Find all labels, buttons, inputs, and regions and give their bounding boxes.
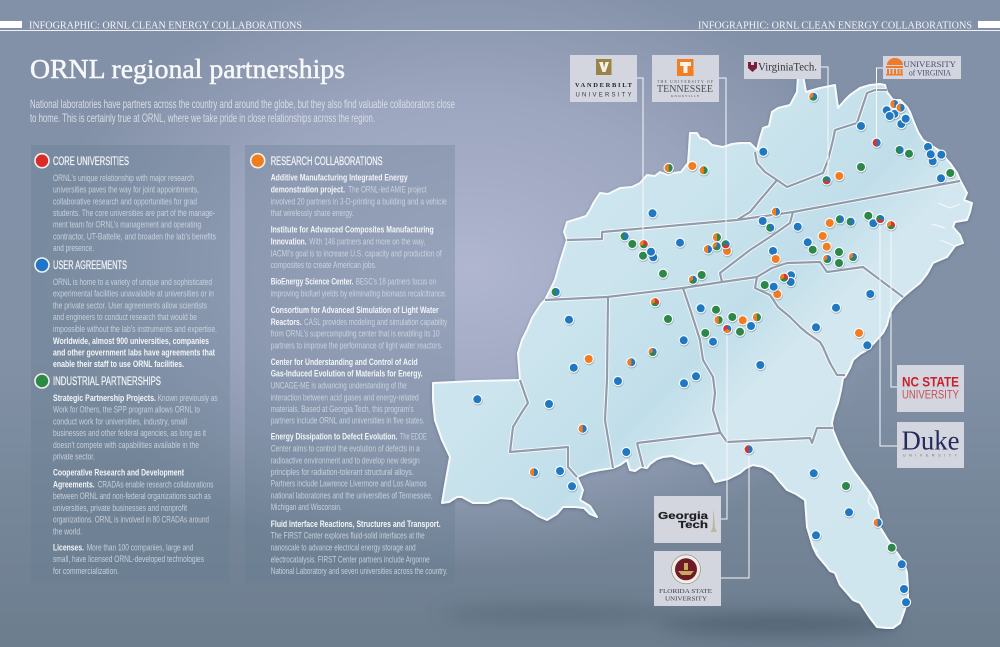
- section: core universities: universities paves the way for joint appointments,: [53, 185, 199, 196]
- map of the southeastern states: [433, 75, 972, 628]
- logo: University of Tennessee: [652, 55, 719, 102]
- logo: Vanderbilt University: VANDERBILT: [575, 82, 633, 89]
- map ground shadow: [440, 605, 900, 635]
- icon: Virginia Tech mark: [748, 62, 757, 72]
- logo: Virginia Tech: VirginiaTech.: [758, 62, 817, 74]
- item: CASL: [271, 305, 447, 351]
- icon: blue bullet: [34, 257, 50, 273]
- logo: Georgia Tech: [654, 496, 721, 543]
- section: core universities: CORE UNIVERSITIES: [53, 156, 129, 168]
- item: IACMI: IACMI's goal is to increase U.S. capacity and production of: [271, 248, 442, 259]
- map markers: Tennessee: [550, 216, 803, 298]
- item: FIRST: National Laboratory and seven universities across the country.: [271, 566, 448, 577]
- section: core universities: ORNL's unique relationship with major research: [53, 173, 194, 184]
- item: FIRST: electrocatalysis. FIRST Center partners include Argonne: [271, 554, 430, 565]
- item: EDDE: Center aims to control the evolution of defects in a: [271, 443, 420, 454]
- item: CASL: from ORNL's supercomputing center that is enabling its 10: [271, 329, 440, 340]
- logo: Vanderbilt University: [570, 55, 637, 102]
- section: industrial partnerships: organizations. ORNL is involved in 80 CRADAs around: [53, 515, 209, 526]
- section: user agreements: impossible without the lab's instruments and expertise.: [53, 324, 217, 335]
- header right: INFOGRAPHIC: ORNL CLEAN ENERGY COLLABORATIONS: [698, 20, 972, 32]
- intro text: National laboratories have partners across the country and around the globe, but they also find valuable collaborators close: [30, 97, 455, 111]
- item: IACMI: With 146 partners and more on the way,: [309, 236, 425, 247]
- section: industrial partnerships: businesses and other federal agencies, as long as it: [53, 428, 206, 439]
- section: industrial partnerships: More than 100 companies, large and: [87, 542, 193, 553]
- item: CASL: Reactors.: [271, 317, 302, 328]
- section: industrial partnerships: Known previously as: [158, 393, 218, 404]
- map markers: Kentucky and West Virginia: [647, 92, 819, 220]
- item: AMIE: that wirelessly share energy.: [271, 208, 354, 219]
- icon: orange bullet: [250, 153, 266, 168]
- item: EDDE: The EDDE: [400, 432, 427, 443]
- section: industrial partnerships: Work for Others, the SPP program allows ORNL to: [53, 405, 200, 416]
- item: FIRST: Fluid Interface Reactions, Structures and Transport.: [271, 519, 441, 530]
- logo: Florida State University: [654, 551, 721, 606]
- logo: Duke University: UNIVERSITY: [903, 454, 958, 458]
- land mass: [433, 75, 972, 628]
- item: EDDE: principles for radiation-tolerant structural alloys.: [271, 467, 414, 478]
- section: user agreements: USER AGREEMENTS: [53, 260, 127, 272]
- item: EDDE: radioactive environment and to develop new design: [271, 455, 420, 466]
- coastal inlets: [812, 203, 960, 552]
- logo: Florida State University: FLORIDA STATE: [659, 588, 712, 595]
- logo: University of Tennessee: THE UNIVERSITY OF: [657, 80, 713, 84]
- icon: Vanderbilt V: [596, 59, 612, 75]
- intro text: [30, 97, 455, 125]
- icon: FSU seal: [672, 555, 700, 584]
- section: industrial partnerships: INDUSTRIAL PARTNERSHIPS: [53, 376, 161, 388]
- section: core universities: students. The core universities are part of the manage-: [53, 208, 215, 219]
- section: core universities: ment team for ORNL's management and operating: [53, 220, 201, 231]
- item: AMIE: demonstration project.: [271, 184, 345, 195]
- section: industrial partnerships: small, have licensed ORNL-developed technologies: [53, 554, 204, 565]
- logo: University of Tennessee: TENNESSEE: [657, 83, 713, 95]
- section: core universities: collaborative research and opportunities for grad: [53, 196, 197, 207]
- section: industrial partnerships: [34, 373, 218, 577]
- section: user agreements: [34, 257, 217, 370]
- item: FIRST: The FIRST Center explores fluid-solid interfaces at the: [271, 531, 425, 542]
- icon: red bullet: [34, 153, 50, 168]
- section: industrial partnerships: Strategic Partnership Projects.: [53, 393, 156, 404]
- section: industrial partnerships: between ORNL and non-federal organizations such as: [53, 491, 211, 502]
- section: user agreements: experimental facilities unavailable at universities or in: [53, 289, 214, 300]
- item: IACMI: Institute for Advanced Composites Manufacturing: [271, 225, 434, 236]
- logo: Georgia Tech: Tech: [678, 519, 708, 531]
- connector lines to university logos: [637, 67, 897, 578]
- section: user agreements: and other government labs have agreements that: [53, 348, 216, 358]
- item: CASL: CASL provides modeling and simulation capability: [304, 317, 447, 328]
- section: industrial partnerships: Licenses.: [53, 542, 84, 553]
- section: industrial partnerships: Cooperative Research and Development: [53, 468, 185, 479]
- map markers: South Carolina and Georgia: [696, 280, 876, 371]
- title: ORNL regional partnerships: [30, 54, 345, 84]
- header left: INFOGRAPHIC: ORNL CLEAN ENERGY COLLABORATIONS: [29, 20, 302, 32]
- item: UNCAGE-ME: Center for Understanding and Control of Acid: [271, 357, 418, 368]
- section: industrial partnerships: CRADAs enable research collaborations: [98, 479, 214, 490]
- item: IACMI: [271, 225, 442, 271]
- item: IACMI: Innovation.: [271, 236, 307, 247]
- intro text: to home. This is certainly true at ORNL, where we take pride in close relationships across the region.: [30, 111, 375, 125]
- item: CASL: partners to improve the performance of light water reactors.: [271, 340, 443, 351]
- item: UNCAGE-ME: Gas-Induced Evolution of Materials for Energy.: [271, 369, 423, 380]
- section: industrial partnerships: private sector.: [53, 452, 95, 463]
- item: EDDE: [271, 432, 433, 513]
- section: user agreements: the private sector. User agreements allow scientists: [53, 300, 207, 312]
- map markers: Virginia: [771, 99, 956, 218]
- item: BESC: BioEnergy Science Center.: [271, 277, 353, 288]
- logo: University of Virginia: of VIRGINIA: [909, 68, 952, 78]
- item: BESC: BESC's 18 partners focus on: [356, 277, 436, 288]
- header left: [0, 20, 1000, 32]
- section: user agreements: and engineers to conduct research that would be: [53, 312, 197, 323]
- logo: NC State University: UNIVERSITY: [902, 390, 959, 402]
- item: EDDE: national laboratories and the universities of Tennessee,: [271, 490, 433, 501]
- section: industrial partnerships: conduct work for universities, industry, small: [53, 416, 187, 427]
- item: FIRST: nanoscale to advance electrical energy storage and: [271, 543, 416, 554]
- panel: left column: [31, 145, 230, 583]
- item: EDDE: Michigan and Wisconsin.: [271, 502, 342, 513]
- section: user agreements: ORNL is home to a variety of unique and sophisticated: [53, 277, 212, 288]
- logo: University of Virginia: [883, 56, 961, 79]
- item: BESC: [271, 277, 447, 299]
- state borders: [510, 90, 960, 477]
- item: BESC: improving biofuel yields by eliminating biomass recalcitrance.: [271, 288, 447, 299]
- section: user agreements: Worldwide, almost 900 universities, companies: [53, 336, 209, 347]
- section: core universities: [34, 153, 216, 254]
- item: UNCAGE-ME: [271, 357, 425, 427]
- item: AMIE: [271, 173, 447, 219]
- item: IACMI: composites to create American jobs.: [271, 260, 377, 271]
- icon: green bullet: [34, 373, 50, 389]
- map markers: North Carolina: [768, 210, 897, 288]
- section: user agreements: enable their staff to use ORNL facilities.: [53, 359, 184, 370]
- item: UNCAGE-ME: interaction between acid gases and energy-related: [271, 392, 419, 403]
- panel: research collaborations: [245, 145, 455, 583]
- map markers: Florida: [744, 444, 912, 608]
- logo: NC State University: [897, 365, 964, 412]
- item: UNCAGE-ME: materials. Based at Georgia Tech, this program's: [271, 404, 414, 415]
- item: CASL: Consortium for Advanced Simulation of Light Water: [271, 305, 439, 316]
- logo: NC State University: NC STATE: [902, 374, 959, 390]
- heading: research collaborations: RESEARCH COLLABORATIONS: [271, 156, 383, 168]
- section: core universities: and presence.: [53, 243, 94, 254]
- section: core universities: contractor, UT-Battelle, and broaden the lab's benefits: [53, 231, 216, 242]
- section: industrial partnerships: universities, private businesses and nonprofit: [53, 503, 187, 514]
- icon: Tech tower: [710, 508, 717, 532]
- item: AMIE: involved 20 partners in 3-D-printing a building and a vehicle: [271, 196, 447, 207]
- map markers: Alabama, Mississippi and Louisiana: [472, 297, 702, 492]
- item: EDDE: Partners include Lawrence Livermore and Los Alamos: [271, 479, 427, 490]
- logo: Duke University: [897, 422, 964, 468]
- section: industrial partnerships: for commercialization.: [53, 566, 119, 577]
- item: AMIE: Additive Manufacturing Integrated Energy: [271, 173, 408, 184]
- logo: University of Virginia: UNIVERSITY: [904, 59, 956, 69]
- icon: Tennessee T: [677, 59, 694, 76]
- logo: Georgia Tech: Georgia: [658, 510, 708, 522]
- logo: Duke University: Duke: [902, 426, 960, 456]
- section: industrial partnerships: the world.: [53, 526, 82, 537]
- icon: rotunda: [886, 58, 903, 76]
- item: AMIE: The ORNL-led AMIE project: [348, 184, 427, 195]
- section: industrial partnerships: Agreements.: [53, 479, 95, 490]
- item: FIRST: [271, 519, 448, 577]
- section: industrial partnerships: doesn't compete with capabilities available in the: [53, 440, 199, 451]
- item: EDDE: Energy Dissipation to Defect Evolution.: [271, 432, 397, 443]
- item: UNCAGE-ME: partners include ORNL and universities in five states.: [271, 416, 425, 427]
- logo: Vanderbilt University: UNIVERSITY: [576, 92, 632, 98]
- logo: University of Tennessee: KNOXVILLE: [671, 94, 699, 98]
- logo: Virginia Tech: [744, 55, 821, 79]
- logo: Florida State University: UNIVERSITY: [665, 596, 707, 602]
- item: UNCAGE-ME: UNCAGE-ME is advancing understanding of the: [271, 380, 407, 391]
